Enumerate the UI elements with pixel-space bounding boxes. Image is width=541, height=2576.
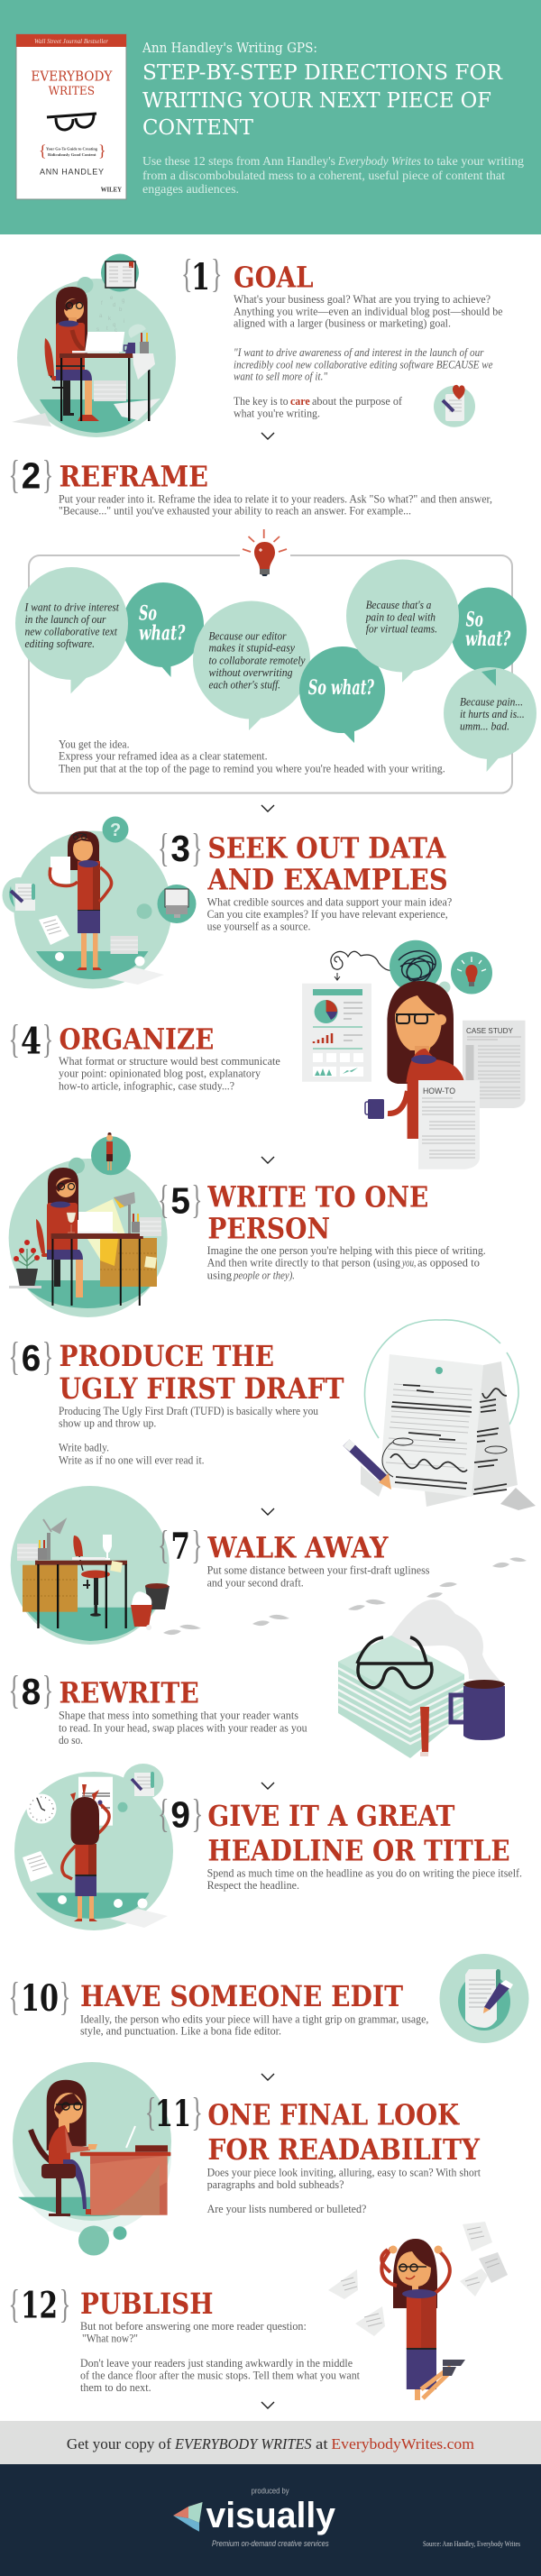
step number 4	[9, 1017, 53, 1062]
step number 3: 3	[170, 828, 190, 869]
illustration: glasses, paper stack and mug	[338, 1600, 505, 1758]
step number 11: }	[191, 2090, 203, 2134]
step number 2	[9, 453, 53, 497]
step number 8: }	[42, 1668, 53, 1712]
illustration: marked-up draft	[346, 1320, 536, 1510]
step number 9: 9	[170, 1794, 190, 1836]
step number 8: {	[9, 1668, 20, 1712]
step number 4: 4	[21, 1020, 41, 1062]
illustration: woman at red desk	[13, 2062, 171, 2256]
illustration: thinking woman with documents	[302, 940, 525, 1169]
illustration: woman with flying papers	[328, 2222, 508, 2400]
panel: step 12	[9, 2222, 508, 2400]
body text	[207, 1243, 486, 1281]
illustration: woman at desk: a	[99, 314, 103, 319]
intro text: Use these 12 steps from Ann Handley's	[142, 154, 335, 168]
text: so what 3	[465, 608, 511, 651]
step number 1: }	[211, 252, 222, 296]
panel: step 1 goal	[12, 252, 503, 437]
step number 4: }	[42, 1017, 53, 1061]
speech bubble: so what 2	[299, 646, 385, 743]
scribble bubble	[331, 940, 451, 1003]
body text: And then write directly to that person (using	[207, 1256, 401, 1270]
speech bubble: because pain	[444, 667, 536, 772]
body text: show up and throw up.	[59, 1416, 156, 1430]
closing text: Express your reframed idea as a clear statement.	[59, 749, 268, 763]
heading: GOAL	[234, 260, 314, 294]
step number 3	[158, 826, 202, 870]
body text: use yourself as a source.	[207, 920, 310, 933]
book cover: {	[39, 142, 47, 160]
illustration: woman at desk: b	[119, 307, 123, 313]
illustration: woman at desk: q	[113, 323, 115, 328]
title: WRITING YOUR NEXT PIECE OF	[142, 89, 491, 113]
heading	[60, 1339, 344, 1406]
panel: footer	[0, 2464, 541, 2576]
book cover: }	[98, 142, 106, 160]
body text: want to sell more of it."	[234, 370, 327, 383]
heading: WRITE TO ONE	[207, 1179, 428, 1214]
closing text: You get the idea.	[59, 737, 130, 750]
step number 2: 2	[22, 455, 41, 497]
case study sheet	[463, 1021, 525, 1108]
book cover	[16, 34, 126, 199]
intro text: from a discombobulated mess to a coherent, useful piece of content that	[142, 169, 505, 182]
body text: what you're writing.	[234, 406, 320, 419]
body text: aligned with a larger (business or marketing) goal.	[234, 316, 451, 330]
panel: call to action	[0, 2421, 541, 2464]
body text: care	[290, 394, 310, 408]
heading: UGLY FIRST DRAFT	[60, 1371, 344, 1406]
step number 10: 10	[21, 1977, 59, 2020]
step number 8: 8	[22, 1671, 41, 1712]
panel: call to action: EVERYBODY WRITES	[174, 2435, 312, 2452]
panel: step 5	[9, 1132, 486, 1317]
body text: using	[207, 1268, 233, 1281]
body text: What credible sources and data support your main idea?	[207, 894, 453, 908]
speech bubble: because pain to deal with	[346, 559, 459, 683]
heading: ONE FINAL LOOK	[207, 2098, 460, 2132]
body text: Imagine the one person you're helping with this piece of writing.	[207, 1243, 486, 1257]
step number 4: {	[9, 1017, 20, 1061]
step number 9: }	[191, 1792, 203, 1836]
speech bubble: idea: new collaborative text	[25, 625, 117, 638]
step number 5: }	[191, 1178, 202, 1222]
body text	[80, 2012, 428, 2038]
arrow	[261, 1157, 274, 1163]
panel: step 2 reframe	[9, 453, 536, 793]
arrow	[261, 2402, 274, 2408]
illustration: woman at desk: s	[96, 327, 99, 333]
panel: call to action: at	[316, 2435, 328, 2452]
body text: how-to article, infographic, case study...?	[59, 1078, 234, 1092]
body text: "What now?"	[82, 2332, 138, 2345]
body text	[59, 1709, 307, 1746]
body text: Respect the headline.	[207, 1878, 299, 1892]
illustration: empty desk	[11, 1486, 170, 1645]
panel: step 11	[13, 2062, 481, 2256]
arrow	[261, 1783, 274, 1789]
speech bubble: because editor	[193, 600, 310, 730]
body text: "I want to drive awareness of and interest in the launch of our	[234, 345, 484, 359]
speech bubble: idea: in the launch of our	[25, 612, 106, 626]
body text: Does your piece look inviting, alluring, easy to scan? With short	[207, 2165, 481, 2178]
body text: Write badly.	[59, 1441, 109, 1454]
woman	[365, 981, 464, 1139]
footprints	[163, 1557, 527, 1635]
arrow	[261, 433, 274, 439]
body text: Spend as much time on the headline as you do on writing the piece itself.	[207, 1866, 522, 1879]
body text: people or they).	[233, 1268, 295, 1281]
intro text: to take your writing	[424, 154, 524, 168]
kicker: Ann Handley's Writing GPS:	[142, 41, 317, 56]
body text: them to do next.	[80, 2380, 151, 2394]
intro text: Everybody Writes	[337, 154, 421, 168]
step number 9: {	[158, 1792, 170, 1836]
step number 11: {	[145, 2090, 156, 2134]
body text: as opposed to	[417, 1256, 480, 1270]
bulb bubble	[451, 952, 492, 994]
illustration: woman at desk: k	[108, 316, 112, 322]
book cover: Your Go-To Guide to Creating	[46, 147, 98, 151]
body text: What format or structure would best communicate	[59, 1054, 280, 1068]
heading	[207, 1799, 510, 1867]
panel: step 4	[9, 940, 525, 1169]
illustration: woman with question	[2, 817, 197, 988]
panel: step 3	[2, 817, 453, 988]
body text	[80, 2319, 360, 2394]
step number 3: {	[158, 826, 170, 870]
heading: REWRITE	[60, 1675, 199, 1710]
arrow	[261, 1508, 274, 1515]
intro text	[142, 154, 524, 196]
body text: of the dance floor after the music stops. Tell them what you want	[80, 2368, 360, 2381]
body text: incredibly cool new collaborative editing software BECAUSE we	[234, 357, 493, 371]
speech bubble: so what 3	[451, 588, 527, 686]
closing text	[59, 737, 445, 775]
body text: Shape that mess into something that your reader wants	[59, 1709, 298, 1722]
body text	[207, 1563, 429, 1589]
body text: Are your lists numbered or bulleted?	[207, 2202, 367, 2215]
heading	[207, 2098, 481, 2167]
how-to sheet: HOW-TO	[423, 1086, 455, 1095]
step number 7: 7	[170, 1526, 190, 1568]
body text: and your second draft.	[207, 1575, 304, 1589]
body text	[207, 2165, 481, 2215]
title: CONTENT	[142, 116, 254, 140]
step number 6: }	[42, 1334, 53, 1379]
illustration: woman at desk: d	[113, 303, 115, 308]
body text: The key is to	[234, 394, 289, 408]
body text: do so.	[59, 1733, 83, 1746]
infographic sheet	[302, 984, 371, 1082]
step number 3: }	[191, 826, 202, 870]
speech bubble: idea	[15, 567, 128, 693]
speech bubble: because pain to deal with: Because that's a	[366, 598, 432, 611]
step number 5: 5	[170, 1180, 190, 1222]
illustration: woman at desk	[12, 254, 176, 437]
book cover: WRITES	[49, 85, 95, 98]
panel: step 9	[14, 1764, 522, 1930]
body text: Producing The Ugly First Draft (TUFD) is basically where you	[59, 1404, 318, 1417]
text: so what 3: what?	[465, 628, 511, 651]
body text: Can you cite examples? If you have relevant experience,	[207, 907, 448, 921]
step number 5: {	[158, 1178, 170, 1222]
step number 2: }	[42, 453, 53, 497]
body text: What's your business goal? What are you trying to achieve?	[234, 292, 491, 306]
heading: SEEK OUT DATA	[207, 831, 446, 866]
body text: Write as if no one will ever read it.	[59, 1453, 205, 1466]
panel: call to action: Get your copy of	[67, 2435, 171, 2452]
body text	[234, 292, 503, 419]
illustration: woman at desk: t	[106, 326, 108, 332]
panel: example box	[15, 529, 536, 793]
panel: step 8	[9, 1600, 505, 1758]
step number 12: 12	[21, 2285, 58, 2327]
step number 10: {	[9, 1975, 20, 2019]
panel: step 6	[9, 1320, 536, 1510]
step number 1: 1	[191, 256, 210, 298]
heading: PRODUCE THE	[60, 1339, 274, 1373]
panel: header	[0, 0, 541, 234]
step number 9	[158, 1792, 203, 1836]
speech bubble: because pain: umm... bad.	[460, 719, 509, 732]
case study sheet: CASE STUDY	[466, 1026, 513, 1035]
speech bubble: because pain: it hurts and is...	[460, 707, 525, 720]
heading: PUBLISH	[80, 2287, 213, 2321]
step number 7: {	[158, 1523, 170, 1567]
speech bubble: because editor: Because our editor	[209, 628, 287, 642]
body text: "Because..." until you've exhausted your ability to reach an answer. For example...	[59, 504, 411, 518]
step number 2: {	[9, 453, 20, 497]
tagline: Premium on-demand creative services	[212, 2539, 329, 2549]
illustration: woman at lamp-lit desk	[9, 1132, 168, 1317]
body text	[59, 1404, 318, 1466]
arrow	[261, 805, 274, 811]
how-to sheet	[418, 1080, 480, 1169]
panel: step 10	[9, 1954, 528, 2043]
step number 12: }	[60, 2282, 70, 2326]
speech bubble: idea: editing software.	[25, 637, 95, 650]
icon: heart and note	[434, 385, 475, 427]
body text: to read. In your head, swap places with your reader as you	[59, 1720, 307, 1734]
heading: GIVE IT A GREAT	[207, 1799, 455, 1833]
book cover: Ridiculously Good Content	[48, 152, 96, 157]
step number 5	[158, 1178, 202, 1222]
body text: about the purpose of	[312, 394, 403, 408]
body text: Anything you write—even an individual blog post—should be	[234, 304, 503, 317]
heading: FOR READABILITY	[207, 2132, 481, 2167]
body text: Put some distance between your first-draft ugliness	[207, 1563, 429, 1577]
source: Source: Ann Handley, Everybody Writes	[423, 2540, 520, 2548]
step number 6	[9, 1334, 53, 1379]
heading: PERSON	[207, 1211, 330, 1245]
step number 6: {	[9, 1334, 20, 1379]
step number 7: }	[191, 1523, 202, 1567]
title	[142, 61, 503, 140]
speech bubble: so what 2: So what?	[308, 676, 375, 700]
produced by label: produced by	[252, 2487, 289, 2497]
illustration: woman facing headline sheet	[14, 1764, 173, 1930]
illustration: woman at desk: f	[101, 301, 103, 307]
illustration: woman with question: ?	[110, 820, 121, 840]
heading: REFRAME	[60, 459, 208, 493]
intro text: engages audiences.	[142, 182, 239, 196]
book cover: Wall Street Journal Bestseller	[34, 37, 108, 45]
body text: But not before answering one more reader question:	[80, 2319, 307, 2333]
heading: HAVE SOMEONE EDIT	[80, 1979, 403, 2013]
body text	[59, 491, 492, 518]
speech bubble: so what 1: what?	[139, 621, 186, 645]
closing text: Then put that at the top of the page to remind you where you're headed with your writing.	[59, 761, 445, 775]
speech bubble: because editor: makes it stupid-easy	[209, 641, 295, 655]
body text: Don't leave your readers just standing awkwardly in the middle	[80, 2356, 353, 2370]
body text: you,	[401, 1256, 416, 1270]
panel: step 7	[11, 1486, 527, 1645]
book cover: WILEY	[101, 187, 122, 194]
body text	[207, 894, 453, 933]
body text: style, and punctuation. Like a bona fide editor.	[80, 2024, 281, 2038]
step number 6: 6	[22, 1337, 41, 1379]
panel: call to action: EverybodyWrites.com	[331, 2435, 474, 2452]
title: STEP-BY-STEP DIRECTIONS FOR	[142, 61, 503, 85]
arrow	[261, 2074, 274, 2080]
text: so what 3: So	[466, 608, 483, 631]
illustration: woman at desk: e	[110, 296, 114, 301]
body text	[59, 1054, 280, 1092]
step number 11: 11	[155, 2093, 191, 2135]
speech bubble: because editor: without overwriting	[209, 665, 293, 679]
speech bubble: because editor: to collaborate remotely	[209, 654, 306, 667]
step number 1	[181, 252, 222, 298]
heading: ORGANIZE	[60, 1022, 214, 1056]
speech bubble: so what 1: So	[139, 601, 157, 625]
speech bubble: because editor: each other's stuff.	[209, 677, 280, 691]
speech bubble: because pain to deal with: for virtual teams.	[366, 622, 437, 636]
step number 8	[9, 1668, 53, 1712]
body text: paragraphs and bold subheads?	[207, 2177, 344, 2191]
step number 1: {	[181, 252, 193, 296]
heading: WALK AWAY	[207, 1531, 390, 1565]
speech bubble: so what 1	[123, 582, 204, 677]
speech bubble: because pain to deal with: pain to deal with	[365, 610, 436, 623]
body text: your point: opinionated blog post, explanatory	[59, 1067, 261, 1080]
step number 12: {	[9, 2282, 20, 2326]
heading	[207, 1179, 428, 1245]
book cover: EVERYBODY	[31, 68, 113, 84]
book cover: ANN HANDLEY	[40, 167, 104, 176]
body text	[207, 1866, 522, 1892]
icon: light bulb	[243, 529, 287, 576]
speech bubble: because pain: Because pain...	[460, 695, 523, 709]
heading	[206, 831, 448, 897]
illustration: woman at desk: g	[122, 298, 124, 304]
body text: Ideally, the person who edits your piece will have a tight grip on grammar, usage,	[80, 2012, 428, 2025]
step number 10: }	[60, 1975, 70, 2019]
step number 7	[158, 1523, 202, 1568]
body text: Put your reader into it. Reframe the idea to relate it to your readers. Ask "So what?" and then answer,	[59, 491, 492, 505]
speech bubble: idea: I want to drive interest	[24, 600, 119, 613]
logo: visually: visually	[206, 2496, 336, 2535]
illustration: woman at desk: c	[115, 328, 117, 334]
heading: AND EXAMPLES	[206, 863, 448, 897]
icon: sheet and pencil	[440, 1954, 528, 2043]
